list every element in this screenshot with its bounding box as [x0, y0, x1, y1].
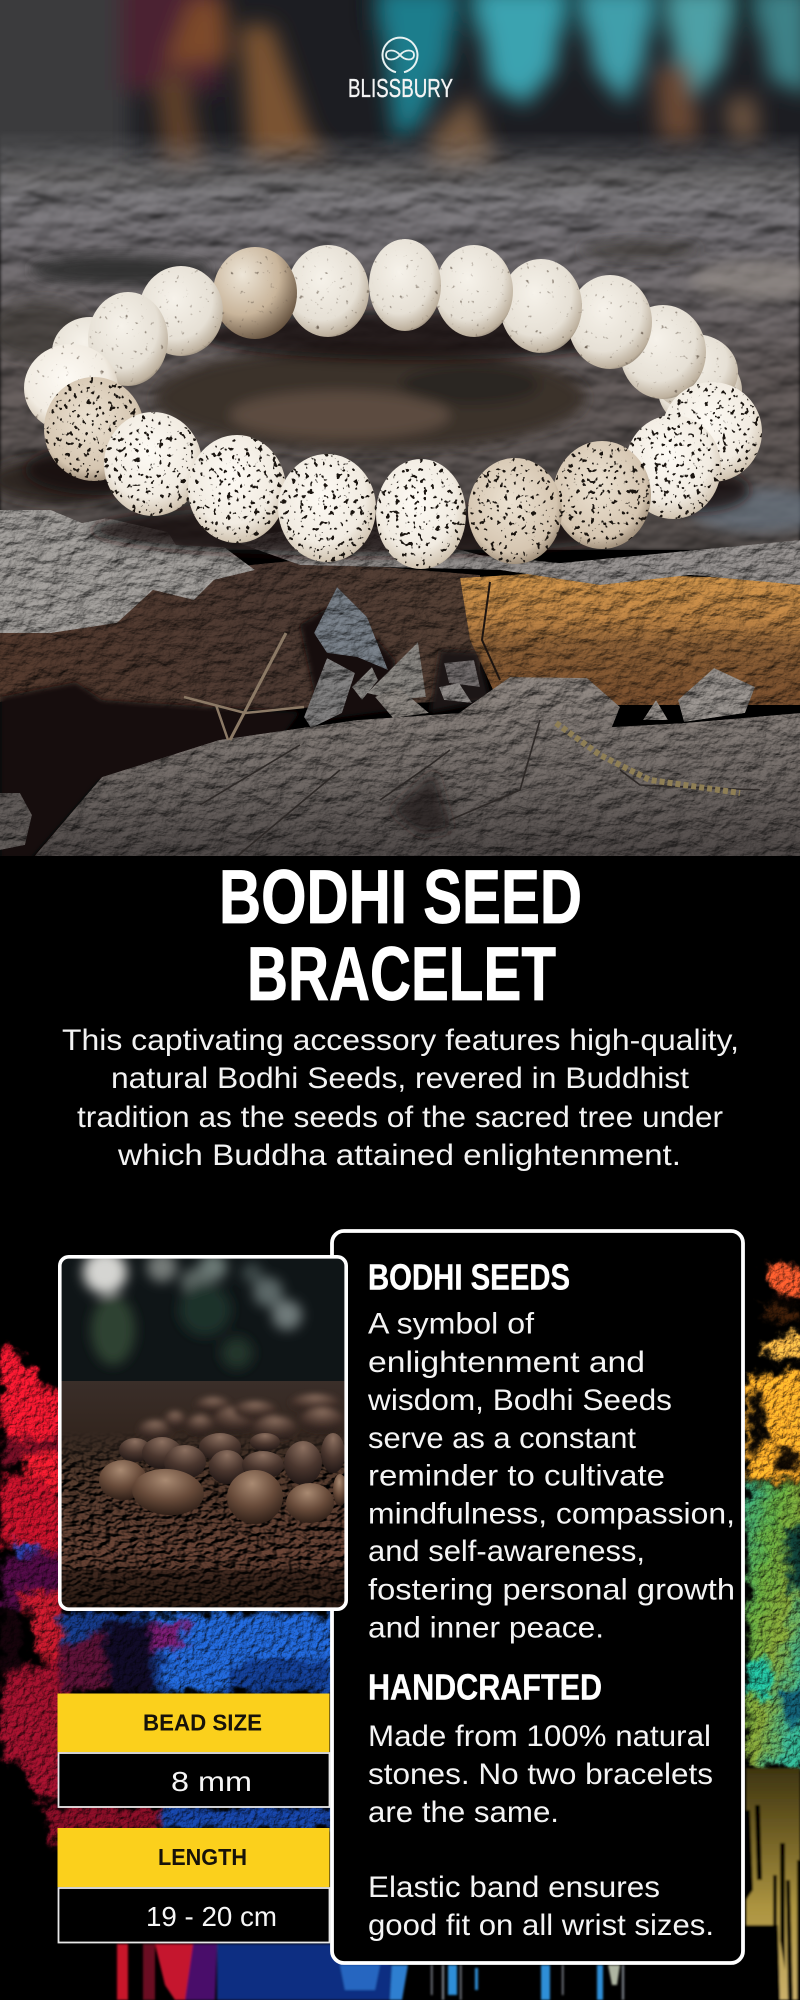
title [219, 855, 582, 1017]
paint splash: right orange and green [745, 1264, 800, 1770]
text: Handcrafted body [368, 1720, 714, 1942]
front seeds [99, 1460, 347, 1524]
dried twigs [184, 633, 304, 740]
shadow gap below ledge [0, 682, 300, 860]
text: Bodhi Seeds body: serve as a constant [368, 1422, 637, 1455]
dark crater inside bracelet [0, 240, 800, 532]
spec table: length [58, 1828, 330, 1942]
icon: infinity ring [382, 38, 418, 72]
text: Bodhi Seeds body: fostering personal growth [368, 1574, 735, 1606]
far rock surface [0, 130, 800, 550]
ledge: left light slab [0, 510, 255, 633]
paint splash: left red and blue [0, 1348, 335, 1849]
text: Bodhi Seeds body: and self-awareness, [368, 1535, 645, 1568]
soil fade near horizon [60, 1381, 346, 1471]
blurred graffiti wall backdrop [0, 0, 800, 230]
label: bead size [58, 1694, 330, 1752]
ledge: left brown face [0, 560, 480, 712]
logo: Blissbury [348, 38, 453, 103]
hero photo: bodhi seed bracelet on rock [0, 0, 800, 860]
text: Handcrafted body: Made from 100% natural [368, 1720, 711, 1753]
text: Bodhi Seeds body [367, 1308, 735, 1644]
spec table: bead size [58, 1694, 330, 1807]
foreground rock [31, 677, 800, 860]
text: Bodhi Seeds body: A symbol of [368, 1308, 535, 1340]
heading: Bodhi Seeds: BODHI SEEDS [368, 1256, 570, 1298]
brand name: BLISSBURY [348, 73, 453, 103]
photo backdrop with bokeh [62, 1258, 344, 1381]
bracelet [24, 239, 762, 569]
title: BODHI SEED [219, 855, 582, 940]
text: Bodhi Seeds body: reminder to cultivate [368, 1460, 665, 1492]
title: BRACELET [247, 932, 556, 1017]
paint drips: bottom [117, 1944, 624, 2000]
text: Bodhi Seeds body: mindfulness, compassion, [368, 1498, 735, 1530]
photo: bodhi seeds on soil [60, 1250, 347, 1610]
gravel and stones [300, 587, 490, 728]
text: Handcrafted body: are the same. [368, 1796, 559, 1829]
text: Bodhi Seeds body: enlightenment and [368, 1346, 645, 1379]
text: Handcrafted body: good fit on all wrist sizes. [368, 1909, 714, 1942]
back beads [24, 239, 742, 432]
paint drips: right olive [746, 1768, 800, 2000]
intro paragraph [62, 1024, 739, 1172]
value: 8 mm [58, 1753, 330, 1807]
value: 19 - 20 cm: 19 - 20 cm [146, 1901, 277, 1932]
value: 8 mm: 8 mm [171, 1766, 252, 1797]
text: Handcrafted body: Elastic band ensures [368, 1871, 660, 1904]
text: Bodhi Seeds body: and inner peace. [368, 1612, 604, 1644]
text: Bodhi Seeds body: wisdom, Bodhi Seeds [367, 1384, 672, 1417]
label: bead size: BEAD SIZE [143, 1710, 262, 1736]
panel: description text box [332, 1231, 743, 1963]
label: length [58, 1828, 330, 1887]
ledge: right grey top [240, 526, 800, 585]
intro paragraph: natural Bodhi Seeds, revered in Buddhist [111, 1062, 690, 1095]
value: 19 - 20 cm [58, 1888, 330, 1942]
text: Handcrafted body: stones. No two bracelets [368, 1758, 713, 1791]
intro paragraph: tradition as the seeds of the sacred tree under [77, 1101, 723, 1134]
label: length: LENGTH [158, 1844, 247, 1870]
intro paragraph: This captivating accessory features high-quality, [62, 1024, 739, 1057]
bead shadows [25, 310, 750, 556]
photo soil [62, 1432, 344, 1608]
front speckled beads [44, 377, 762, 569]
rope strand [556, 723, 740, 793]
intro paragraph: which Buddha attained enlightenment. [117, 1139, 681, 1172]
ledge: right orange face [460, 572, 800, 705]
heading: Handcrafted: HANDCRAFTED [368, 1666, 602, 1708]
mid seeds [119, 1433, 345, 1485]
far seeds [138, 1394, 344, 1440]
